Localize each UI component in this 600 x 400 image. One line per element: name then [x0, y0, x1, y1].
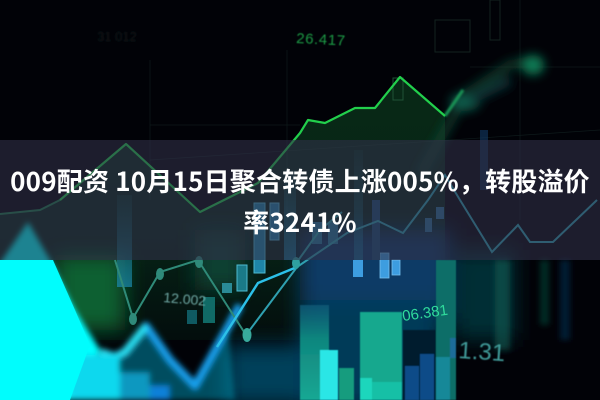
- bottom bright cyan patch: [0, 260, 90, 400]
- bottom bar chart: [300, 260, 456, 400]
- lower teal and navy glow: [55, 230, 515, 400]
- top faded number: 31.012: [97, 29, 137, 44]
- cyan blurred mountain: [0, 222, 240, 400]
- title: [10, 162, 590, 240]
- faint candlesticks at top: [393, 0, 500, 100]
- faint right bars: [495, 260, 570, 350]
- faint grid lines: [150, 0, 600, 230]
- title band: [0, 140, 600, 260]
- green area under the line: [0, 77, 445, 340]
- blue candlestick columns: [117, 130, 488, 324]
- number 1.31: 1.31: [458, 337, 506, 367]
- teal-blue line with markers: [115, 175, 597, 347]
- number 12.002: 12.002: [163, 289, 207, 309]
- title: 009配资 10月15日聚合转债上涨005%，转股溢价: [10, 162, 590, 199]
- number 06.381: 06.381: [401, 302, 449, 325]
- green main line: [0, 77, 445, 214]
- green number 26.417: 26.417: [296, 30, 346, 50]
- blurred green diagonal: [420, 55, 544, 175]
- title: 率3241%: [243, 203, 357, 240]
